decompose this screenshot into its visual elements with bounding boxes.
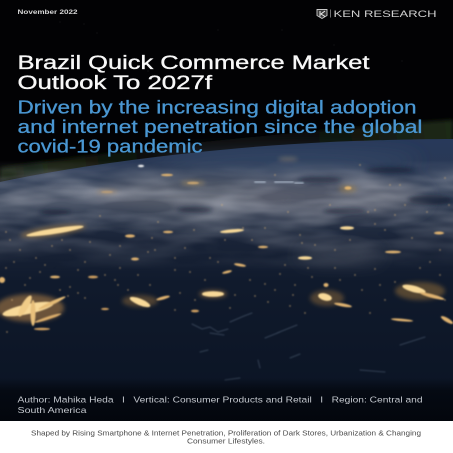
- bright cloud-lit lights: [255, 182, 303, 183]
- city lights: [0, 174, 453, 330]
- dark cloud gaps: [39, 167, 452, 214]
- author line: South America: [18, 405, 87, 415]
- clouds: [0, 152, 425, 260]
- stars: [60, 22, 402, 71]
- dark author band: [0, 378, 453, 421]
- atmosphere glow on the horizon: [0, 120, 453, 182]
- title: Outlook To 2027f: [18, 73, 213, 94]
- earth at night: [0, 139, 453, 390]
- subtitle: covid-19 pandemic: [18, 136, 202, 156]
- cloud texture: [0, 163, 453, 264]
- small settlement lights: [6, 165, 449, 332]
- subtitle: [18, 98, 422, 156]
- footer panel: [0, 421, 453, 453]
- title: [18, 53, 370, 94]
- subtitle: and internet penetration since the global: [18, 117, 422, 137]
- author line: Author: Mahika Heda I Vertical: Consumer Products and Retail I Region: Central and: [18, 394, 423, 404]
- city glow: [0, 157, 445, 322]
- blue-white lights and rivers: [192, 313, 425, 380]
- logo: Ken Research: [317, 9, 436, 19]
- bright spot near horizon: [138, 165, 144, 167]
- subtitle: Driven by the increasing digital adoption: [18, 98, 416, 118]
- footer text: [31, 428, 421, 446]
- icon: shield: [317, 10, 327, 18]
- logo wordmark: KEN RESEARCH: [334, 9, 436, 19]
- author line: [18, 394, 423, 415]
- title: Brazil Quick Commerce Market: [18, 53, 370, 74]
- footer text: Shaped by Rising Smartphone & Internet Penetration, Proliferation of Dark Stores, Urbanization & Changing: [31, 428, 421, 438]
- footer text: Consumer Lifestyles.: [187, 436, 265, 446]
- date: November 2022: [18, 9, 78, 16]
